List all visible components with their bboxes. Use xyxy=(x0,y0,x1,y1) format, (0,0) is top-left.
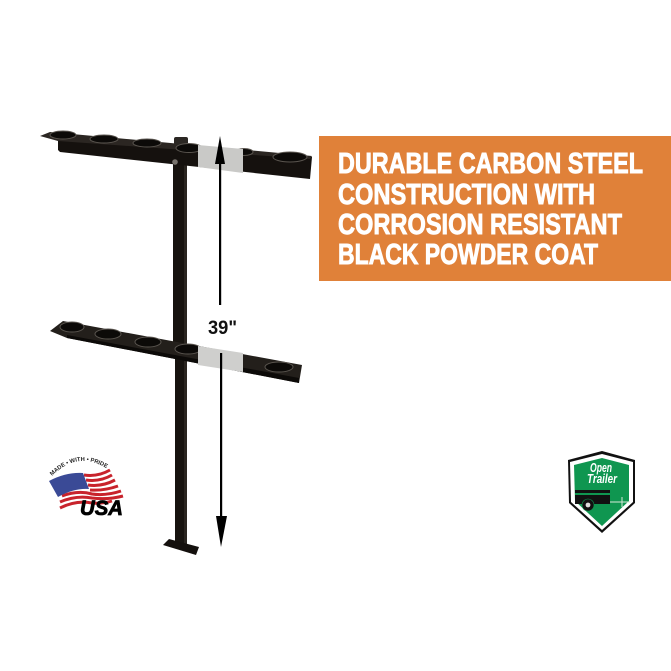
panel text xyxy=(338,148,643,271)
shield label: Open xyxy=(590,461,612,475)
trailer icon xyxy=(575,490,630,511)
orange feature panel xyxy=(319,136,671,281)
USA wordmark: USA xyxy=(80,497,123,520)
rack post xyxy=(173,160,187,544)
dimension label: 39" xyxy=(208,318,237,339)
badge: open trailer shield xyxy=(568,451,635,533)
shield label: Trailer xyxy=(587,472,618,486)
flag arc caption: MADE • WITH • PRIDE xyxy=(50,457,108,476)
post base plate xyxy=(163,539,199,555)
shield label xyxy=(587,461,618,486)
badge: made with pride USA flag xyxy=(49,457,124,520)
panel text: CORROSION RESISTANT xyxy=(338,209,622,241)
panel text: CONSTRUCTION WITH xyxy=(338,179,595,211)
top holder bar xyxy=(40,131,312,179)
panel text: BLACK POWDER COAT xyxy=(338,239,598,271)
dimension arrow: 39 inches xyxy=(208,136,237,547)
translucent band on lower bar xyxy=(198,346,243,372)
translucent band on top bar xyxy=(198,145,243,173)
flag stripes xyxy=(49,469,124,509)
lower holder bar xyxy=(50,321,302,383)
